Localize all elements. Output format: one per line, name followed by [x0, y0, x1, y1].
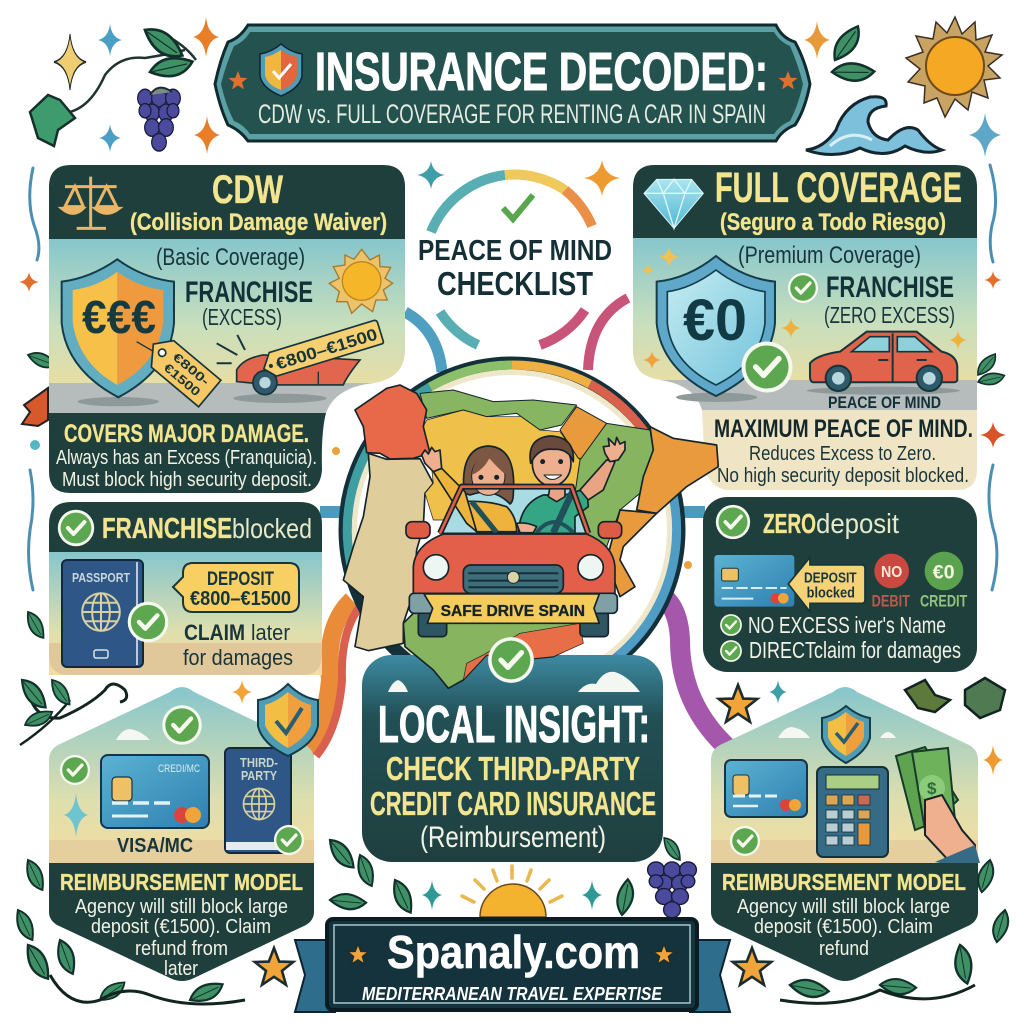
panel: CDW [49, 165, 405, 493]
panel: CDW: (Collision Damage Waiver) [130, 209, 387, 236]
price tag on shield: €1500 [161, 361, 203, 399]
region: north coast [420, 390, 577, 430]
icon: cash in hand: $ [927, 779, 937, 798]
decorative vines, leaves and stars: top left [30, 17, 220, 154]
title banner: INSURANCE DECODED: [315, 42, 768, 102]
icon: red car [807, 332, 960, 395]
panel: reimbursement right: refund [819, 938, 869, 960]
sparkles [642, 247, 967, 369]
region: Aragon [570, 423, 653, 547]
panel: CDW: FRANCHISE [185, 276, 313, 309]
panel: Franchise blocked [49, 502, 322, 675]
panel: Full Coverage: (Seguro a Todo Riesgo) [720, 209, 946, 236]
icon: third-party booklet [225, 748, 291, 853]
price tag on shield: €800- [170, 350, 212, 388]
icon: damaged car with price tag [217, 320, 384, 403]
headlights [423, 555, 449, 580]
icon: card and deposit arrow [714, 555, 865, 612]
panel: reimbursement right [711, 687, 980, 981]
side wavy decorations [29, 165, 997, 590]
banner: safe drive spain [424, 594, 599, 623]
icon: damaged car with price tag: €800–€1500 [274, 325, 380, 374]
panel: reimbursement left: later [164, 958, 198, 980]
title banner [215, 25, 810, 141]
connector pipes [305, 298, 730, 756]
panel: reimbursement left: VISA/MC [117, 835, 193, 857]
icon: scales [62, 177, 119, 228]
icon: shield [822, 706, 870, 763]
car body [413, 534, 615, 593]
panel: Full Coverage: FRANCHISE [826, 271, 954, 304]
no debit / credit badges: NO [881, 564, 902, 581]
car with two people [406, 436, 625, 637]
icon: passport: PASSPORT [72, 570, 130, 585]
local insight panel [362, 655, 663, 862]
panel: CDW: COVERS MAJOR DAMAGE. [64, 420, 309, 448]
person: man [518, 436, 625, 533]
panel: reimbursement left: REIMBURSEMENT MODEL [60, 869, 303, 895]
callout: deposit [173, 563, 299, 612]
no debit / credit badges: €0 [933, 562, 955, 583]
region: Murcia [463, 623, 583, 680]
panel: CDW: Must block high security deposit. [62, 469, 312, 491]
no debit / credit badges [872, 552, 967, 611]
callout: deposit: €800–€1500 [190, 588, 291, 610]
clouds [388, 672, 640, 692]
local insight panel: CHECK THIRD-PARTY [386, 750, 640, 787]
region: Basque and Navarra [560, 407, 607, 458]
icon: third-party booklet: PARTY [241, 768, 277, 783]
icon: sun [329, 249, 393, 313]
decorative vines bottom corners [13, 675, 1013, 1005]
panel: Zero deposit: deposit [816, 508, 899, 539]
panel: Franchise blocked: later [251, 620, 290, 645]
panel: Full Coverage: (Premium Coverage) [738, 242, 921, 269]
peace of mind checklist: PEACE OF MIND [418, 235, 612, 267]
region: Portugal [343, 453, 433, 651]
icon: euro shield [62, 259, 174, 406]
scattered small stars and dots [19, 160, 1006, 985]
icon: title shield [260, 44, 302, 96]
icon: zero shield [657, 256, 775, 402]
panel: Franchise blocked: CLAIM [184, 620, 245, 645]
title banner: CDW vs. FULL COVERAGE FOR RENTING A CAR IN SPAIN [258, 99, 766, 129]
icon: credit card [101, 755, 209, 828]
panel: reimbursement right: Agency will still block large [737, 896, 950, 918]
banner: safe drive spain: SAFE DRIVE SPAIN [441, 603, 585, 620]
wheels [418, 612, 447, 637]
mirrors [406, 522, 430, 538]
panel: Franchise blocked: blocked [232, 513, 312, 544]
icon: credit card: CREDI/MC [158, 763, 200, 775]
panel: CDW: CDW [212, 168, 283, 212]
panel: Franchise blocked: FRANCHISE [102, 513, 232, 545]
peace of mind checklist: CHECKLIST [437, 265, 593, 302]
panel: CDW: Always has an Excess (Franquicia). [56, 447, 317, 469]
clouds [116, 729, 150, 740]
panel: Full Coverage: Reduces Excess to Zero. [749, 443, 936, 465]
callout: deposit: DEPOSIT [207, 569, 274, 590]
brand banner: MEDITERRANEAN TRAVEL EXPERTISE [362, 984, 663, 1004]
panel: reimbursement left: refund from [135, 938, 228, 960]
panel: reimbursement left [49, 684, 318, 981]
panel: Franchise blocked: for damages [183, 645, 293, 670]
panel: Zero deposit [703, 497, 977, 672]
panel: Full Coverage [633, 164, 977, 490]
brand banner: Spanaly.com [387, 926, 640, 978]
panel: Full Coverage: €0 [683, 288, 747, 353]
grille [463, 565, 563, 593]
region: Andalusia [403, 607, 587, 688]
local insight panel: (Reimbursement) [420, 821, 606, 854]
panel: reimbursement right: REIMBURSEMENT MODEL [722, 869, 966, 895]
icon: passport [62, 560, 143, 667]
icon: card and deposit arrow: blocked [807, 585, 855, 601]
icon: cash in hand [896, 747, 980, 863]
icon: map check [488, 637, 534, 683]
icon: diamond [644, 179, 703, 228]
panel: Zero deposit: DIRECTclaim for damages [749, 637, 961, 663]
windscreen [440, 488, 588, 533]
decorative sun, wave and leaves: top right [804, 17, 1002, 157]
icon: third-party booklet: THIRD- [240, 755, 278, 770]
map of Spain and Portugal with regions [343, 385, 718, 688]
panel: CDW: €€€ [82, 291, 156, 343]
panel: reimbursement right: deposit (€1500). Claim [754, 916, 933, 938]
no debit / credit badges: CREDIT [920, 592, 967, 611]
windscreen frame [440, 487, 588, 533]
region: Catalonia [637, 427, 718, 513]
icon: card and deposit arrow: DEPOSIT [804, 570, 857, 586]
panel: Full Coverage: (ZERO EXCESS) [824, 302, 955, 328]
panel: CDW: (Basic Coverage) [156, 244, 305, 271]
icon: credit card [725, 760, 807, 817]
region: Castile [422, 410, 580, 520]
map circle and Spain map [345, 363, 679, 697]
no debit / credit badges: DEBIT [872, 592, 910, 611]
brand banner [295, 919, 730, 1012]
panel: Zero deposit: NO EXCESS iver's Name [748, 612, 946, 638]
panel: CDW: (EXCESS) [202, 304, 282, 330]
panel: Full Coverage: No high security deposit blocked. [717, 465, 969, 487]
bumper [409, 593, 617, 613]
panel: Zero deposit: ZERO [763, 508, 816, 539]
panel: reimbursement left: deposit (€1500). Claim [91, 916, 271, 938]
price tag on shield [137, 332, 221, 407]
region: Galicia [355, 385, 430, 459]
icon: calculator [817, 767, 888, 857]
local insight panel: CREDIT CARD INSURANCE [370, 785, 656, 822]
local insight panel: LOCAL INSIGHT: [378, 696, 650, 754]
panel: Full Coverage: PEACE OF MIND [828, 393, 941, 412]
icon: gold shield [258, 684, 318, 756]
person: woman [422, 446, 537, 533]
region: Valencia [607, 510, 657, 597]
peace of mind checklist [418, 175, 612, 345]
panel: reimbursement left: Agency will still block large [75, 896, 288, 918]
bottom sun, leaves and grapes [325, 834, 696, 918]
